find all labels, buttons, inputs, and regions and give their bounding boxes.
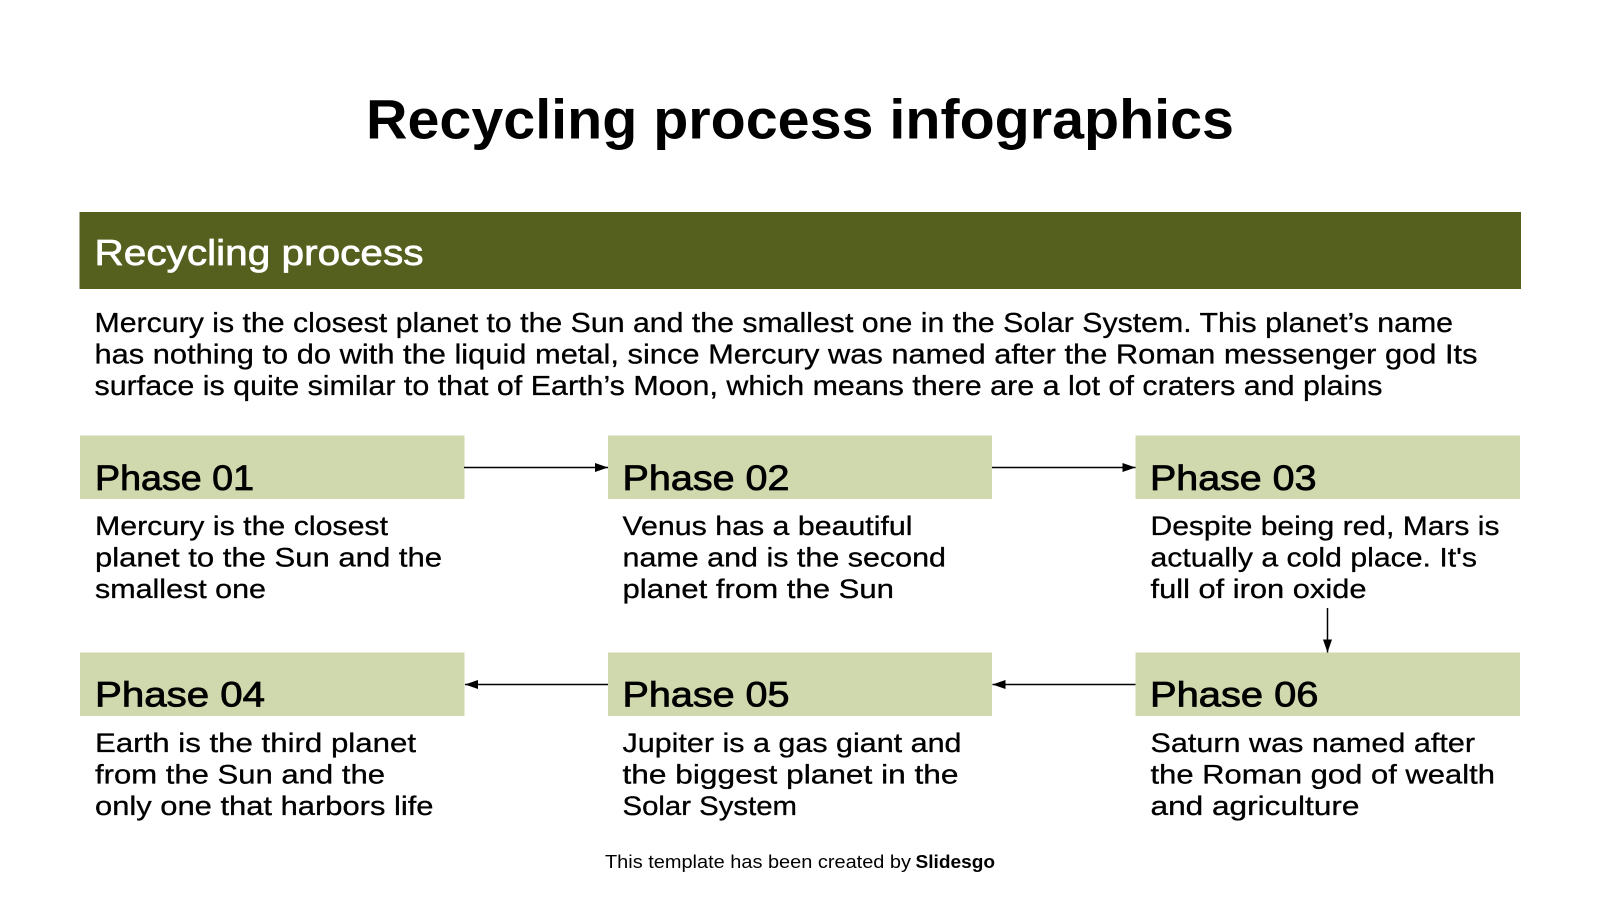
text: phase 02 description: Venus has a beautiful [622,511,912,541]
text: phase 01 description: smallest one [95,574,266,604]
panel: phase 02 [608,436,992,604]
panel: phase 04 [80,652,464,821]
text: phase 02 description: name and is the second [622,542,946,572]
text: phase 05 description: Solar System [622,791,797,821]
text: phase 03 description: actually a cold place. It's [1150,542,1477,572]
arrow: phase 01 to phase 02 [464,466,608,468]
text: phase 01 description: Mercury is the closest [95,511,389,541]
text: phase 06 description [1150,728,1495,821]
arrow: phase 03 to phase 06 [1326,608,1328,652]
text block: introduction: Mercury is the closest planet to the Sun and the smallest one in the Solar System. This planet’s name [94,307,1453,338]
text: phase 01 description: planet to the Sun and the [95,542,442,572]
heading: phase 04: Phase 04 [95,676,265,714]
text: phase 03 description: full of iron oxide [1150,574,1366,604]
arrow: phase 02 to phase 03 [992,466,1136,468]
text: phase 06 description: Saturn was named after [1150,728,1475,758]
footer credit: Slidesgo [916,852,995,872]
text block: introduction [94,307,1478,401]
panel: phase 06 [1136,652,1520,821]
panel: recycling process header [80,212,1521,289]
text: phase 04 description: from the Sun and the [95,760,385,790]
text: phase 06 description: the Roman god of wealth [1150,760,1495,790]
panel: phase 03 [1136,436,1520,604]
text: phase 04 description: only one that harbors life [95,791,434,821]
text: phase 01 description [95,511,442,604]
arrow: phase 05 to phase 04 [465,684,608,686]
footer credit: This template has been created by [605,852,911,872]
panel: phase 05 [608,652,992,821]
text block: introduction: has nothing to do with the liquid metal, since Mercury was named after the Roman messenger god Its [94,338,1478,370]
text: phase 05 description: Jupiter is a gas giant and [622,728,962,758]
text: phase 03 description: Despite being red, Mars is [1150,511,1500,541]
text: phase 04 description [95,728,434,821]
text: phase 05 description [622,728,962,821]
text: phase 06 description: and agriculture [1150,791,1360,821]
text: phase 02 description [622,511,946,604]
title: Recycling process infographics [366,88,1234,150]
text: phase 05 description: the biggest planet in the [622,760,958,790]
text: phase 04 description: Earth is the third planet [95,728,417,758]
heading: phase 01: Phase 01 [95,459,254,498]
heading: phase 02: Phase 02 [622,459,790,498]
text: phase 02 description: planet from the Sun [622,574,894,604]
heading: recycling process: Recycling process [94,232,424,273]
panel: phase 01 [80,436,464,604]
arrow: phase 06 to phase 05 [992,684,1136,686]
heading: phase 05: Phase 05 [622,676,790,714]
text block: introduction: surface is quite similar to that of Earth’s Moon, which means there are a lot of craters and plains [94,370,1382,401]
text: phase 03 description [1150,511,1500,604]
heading: phase 06: Phase 06 [1150,676,1318,714]
heading: phase 03: Phase 03 [1150,459,1316,498]
